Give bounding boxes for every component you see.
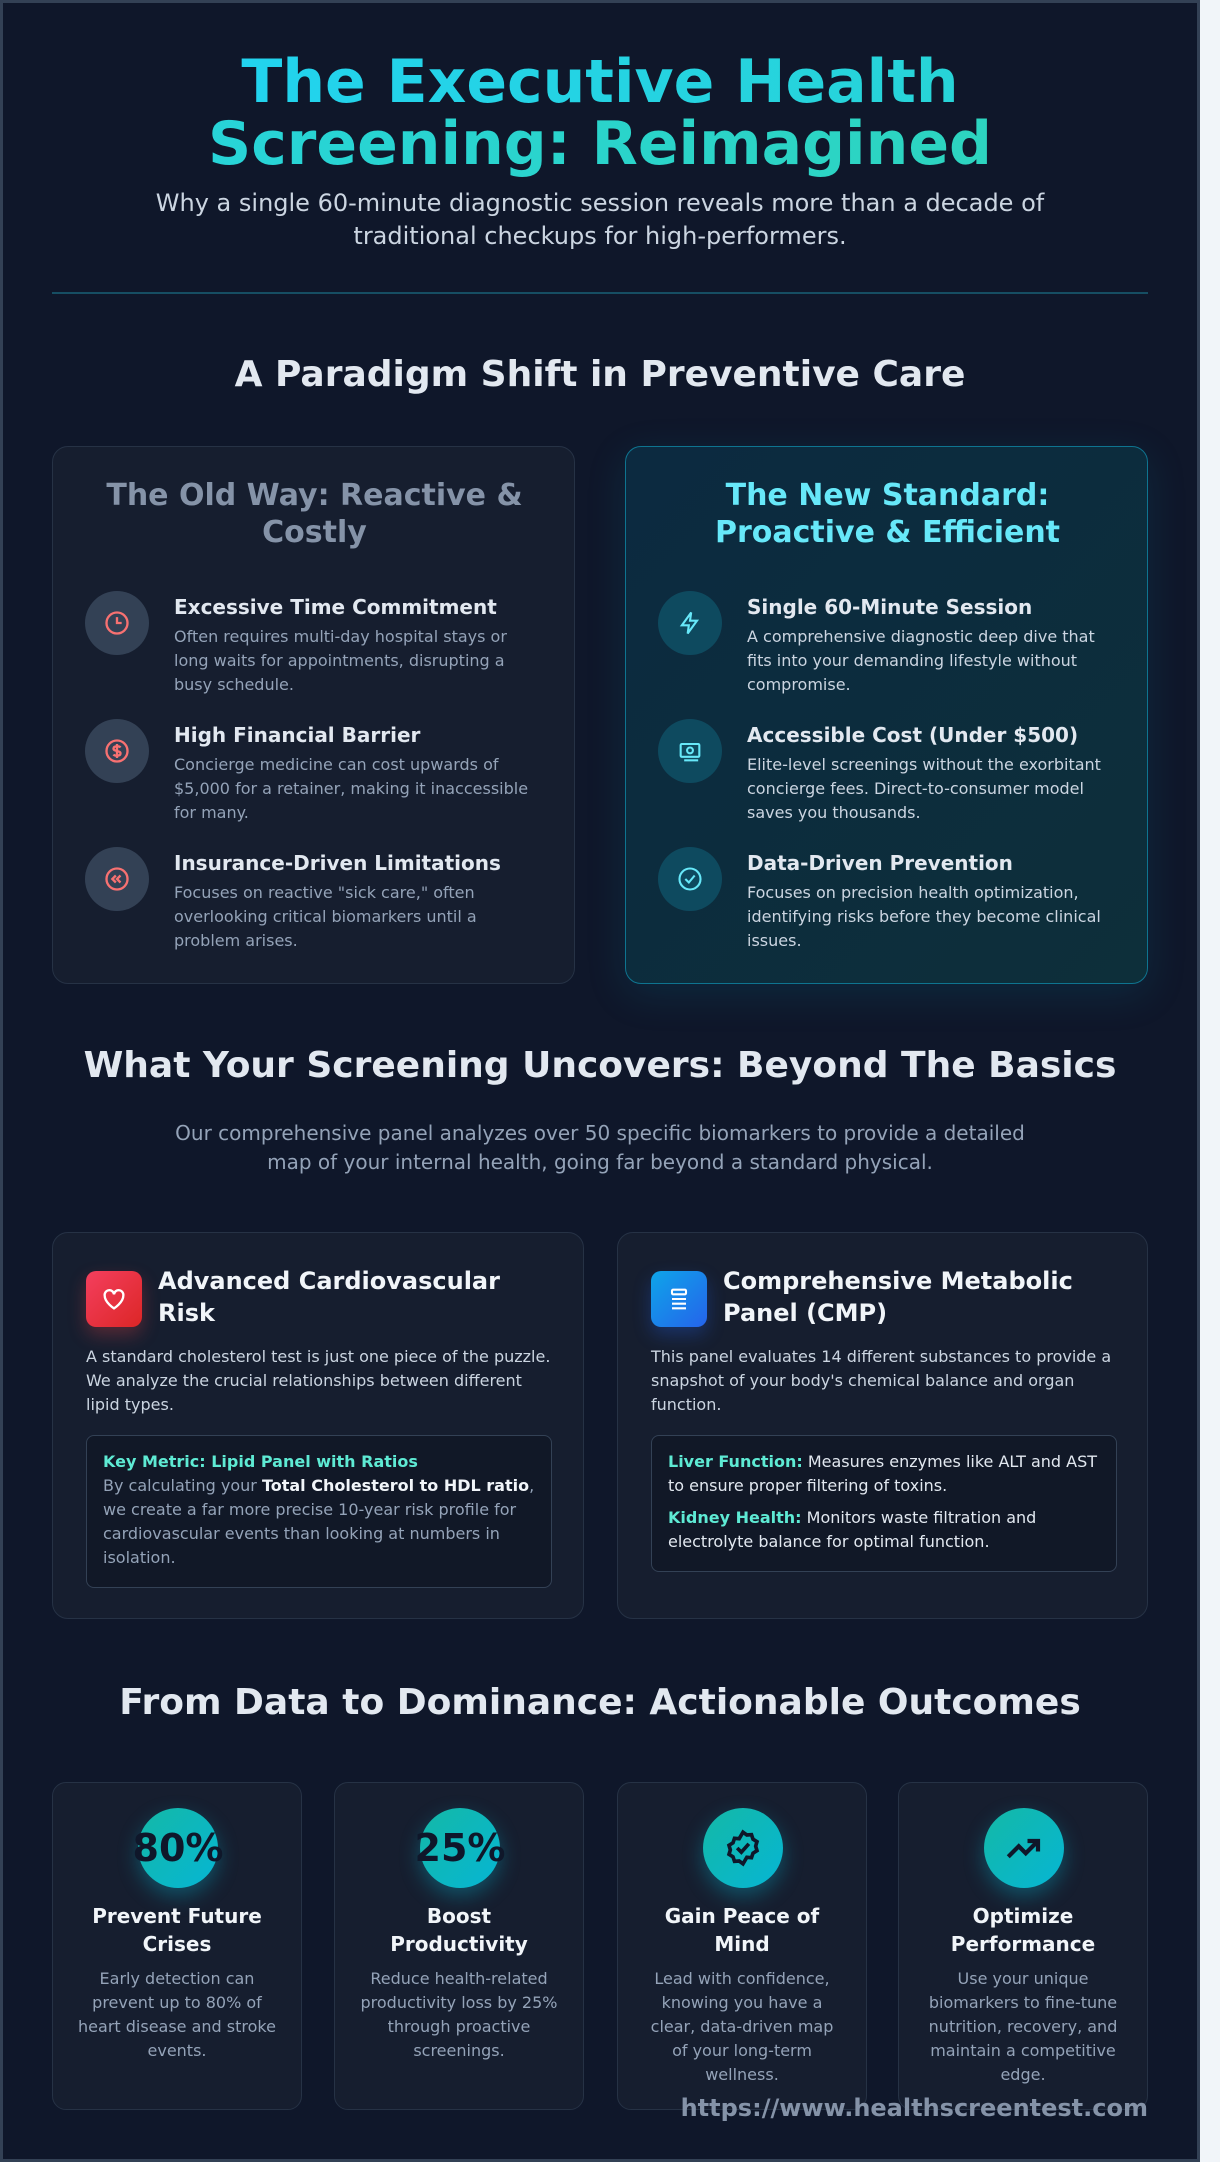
item: data: Data-Driven Prevention bbox=[747, 851, 1013, 875]
title: The Executive Health bbox=[241, 47, 959, 117]
subtitle: Why a single 60-minute diagnostic session reveals more than a decade of traditional checkups for high-performers. bbox=[156, 189, 1044, 250]
panel: new standard bbox=[625, 446, 1148, 984]
panel: old way bbox=[52, 446, 575, 984]
card title: Comprehensive Metabolic Panel (CMP) bbox=[723, 1267, 1073, 1327]
item: session: A comprehensive diagnostic deep dive that fits into your demanding lifestyle without compromise. bbox=[747, 627, 1095, 694]
card text: A standard cholesterol test is just one piece of the puzzle. We analyze the crucial relationships between different lipid types. bbox=[86, 1347, 550, 1414]
function box: Kidney Health: Monitors waste filtration and electrolyte balance for optimal function. bbox=[668, 1508, 1036, 1551]
item: insurance: Insurance-Driven Limitations bbox=[174, 851, 501, 875]
panel title: new standard: Proactive & Efficient bbox=[715, 515, 1060, 550]
item: financial bbox=[85, 719, 528, 822]
item: cost: Accessible Cost (Under $500) bbox=[747, 723, 1078, 747]
intro text: Our comprehensive panel analyzes over 50 specific biomarkers to provide a detailed map of your internal health, going far beyond a standard physical. bbox=[175, 1121, 1025, 1174]
heading: uncovers: What Your Screening Uncovers: Beyond The Basics bbox=[84, 1045, 1116, 1086]
outcome: performance: Optimize Performance bbox=[951, 1904, 1095, 1956]
title: Screening: Reimagined bbox=[208, 109, 992, 179]
outcome: peace: Gain Peace of Mind bbox=[665, 1904, 819, 1956]
key metric box: Key Metric: Lipid Panel with Ratios bbox=[103, 1452, 418, 1471]
outcome: prevent: 80% bbox=[133, 1826, 223, 1870]
title bbox=[208, 47, 992, 179]
outcome: performance: Use your unique biomarkers to fine-tune nutrition, recovery, and maintain a competitive edge. bbox=[929, 1969, 1117, 2084]
outcome: prevent: Prevent Future Crises bbox=[92, 1904, 262, 1956]
icon: panel bbox=[651, 1271, 707, 1327]
function box: Liver Function: Measures enzymes like ALT and AST to ensure proper filtering of toxins. bbox=[668, 1452, 1097, 1495]
key metric box bbox=[86, 1435, 552, 1588]
function box bbox=[651, 1435, 1117, 1572]
item: cost: Elite-level screenings without the exorbitant concierge fees. Direct-to-consumer model saves you thousands. bbox=[747, 755, 1101, 822]
outcome: prevent: Early detection can prevent up to 80% of heart disease and stroke events. bbox=[78, 1969, 276, 2060]
outcome: performance bbox=[898, 1782, 1148, 2110]
url footer: https://www.healthscreentest.com bbox=[681, 2094, 1148, 2122]
item: insurance bbox=[85, 847, 501, 950]
panel title: new standard: The New Standard: bbox=[726, 478, 1049, 513]
item: insurance: Focuses on reactive "sick care," often overlooking critical biomarkers until a problem arises. bbox=[174, 883, 477, 950]
panel title: new standard bbox=[715, 478, 1060, 550]
item: financial: Concierge medicine can cost upwards of $5,000 for a retainer, making it inaccessible for many. bbox=[174, 755, 528, 822]
item: time: Often requires multi-day hospital stays or long waits for appointments, disrupting a busy schedule. bbox=[174, 627, 507, 694]
item: financial: High Financial Barrier bbox=[174, 723, 420, 747]
outcome: prevent bbox=[52, 1782, 302, 2110]
item: data: Focuses on precision health optimization, identifying risks before they become clinical issues. bbox=[747, 883, 1101, 950]
card title: Advanced Cardiovascular Risk bbox=[158, 1267, 500, 1327]
heading: outcomes: From Data to Dominance: Actionable Outcomes bbox=[119, 1682, 1081, 1723]
panel title: old way: The Old Way: Reactive & Costly bbox=[106, 478, 523, 550]
card: metabolic bbox=[617, 1232, 1148, 1619]
outcome: peace: Lead with confidence, knowing you have a clear, data-driven map of your long-term wellness. bbox=[651, 1969, 833, 2084]
item: session: Single 60-Minute Session bbox=[747, 595, 1032, 619]
outcome: peace bbox=[617, 1782, 867, 2110]
outcome: productivity: 25% bbox=[415, 1826, 505, 1870]
item: session bbox=[658, 591, 1095, 694]
outcome: productivity: Reduce health-related productivity loss by 25% through proactive screenings. bbox=[360, 1969, 558, 2060]
icon: heart bbox=[86, 1271, 142, 1327]
key metric box: By calculating your Total Cholesterol to HDL ratio, we create a far more precise 10-year risk profile for cardiovascular events than looking at numbers in isolation. bbox=[103, 1476, 534, 1567]
outcome: productivity: Boost Productivity bbox=[390, 1904, 528, 1956]
card: cardiovascular bbox=[52, 1232, 584, 1619]
item: data bbox=[658, 847, 1101, 950]
heading: paradigm shift: A Paradigm Shift in Preventive Care bbox=[235, 354, 965, 395]
item: time: Excessive Time Commitment bbox=[174, 595, 497, 619]
card text: This panel evaluates 14 different substances to provide a snapshot of your body's chemical balance and organ function. bbox=[651, 1347, 1111, 1414]
item: time bbox=[85, 591, 507, 694]
outcome: productivity bbox=[334, 1782, 584, 2110]
item: cost bbox=[658, 719, 1101, 822]
